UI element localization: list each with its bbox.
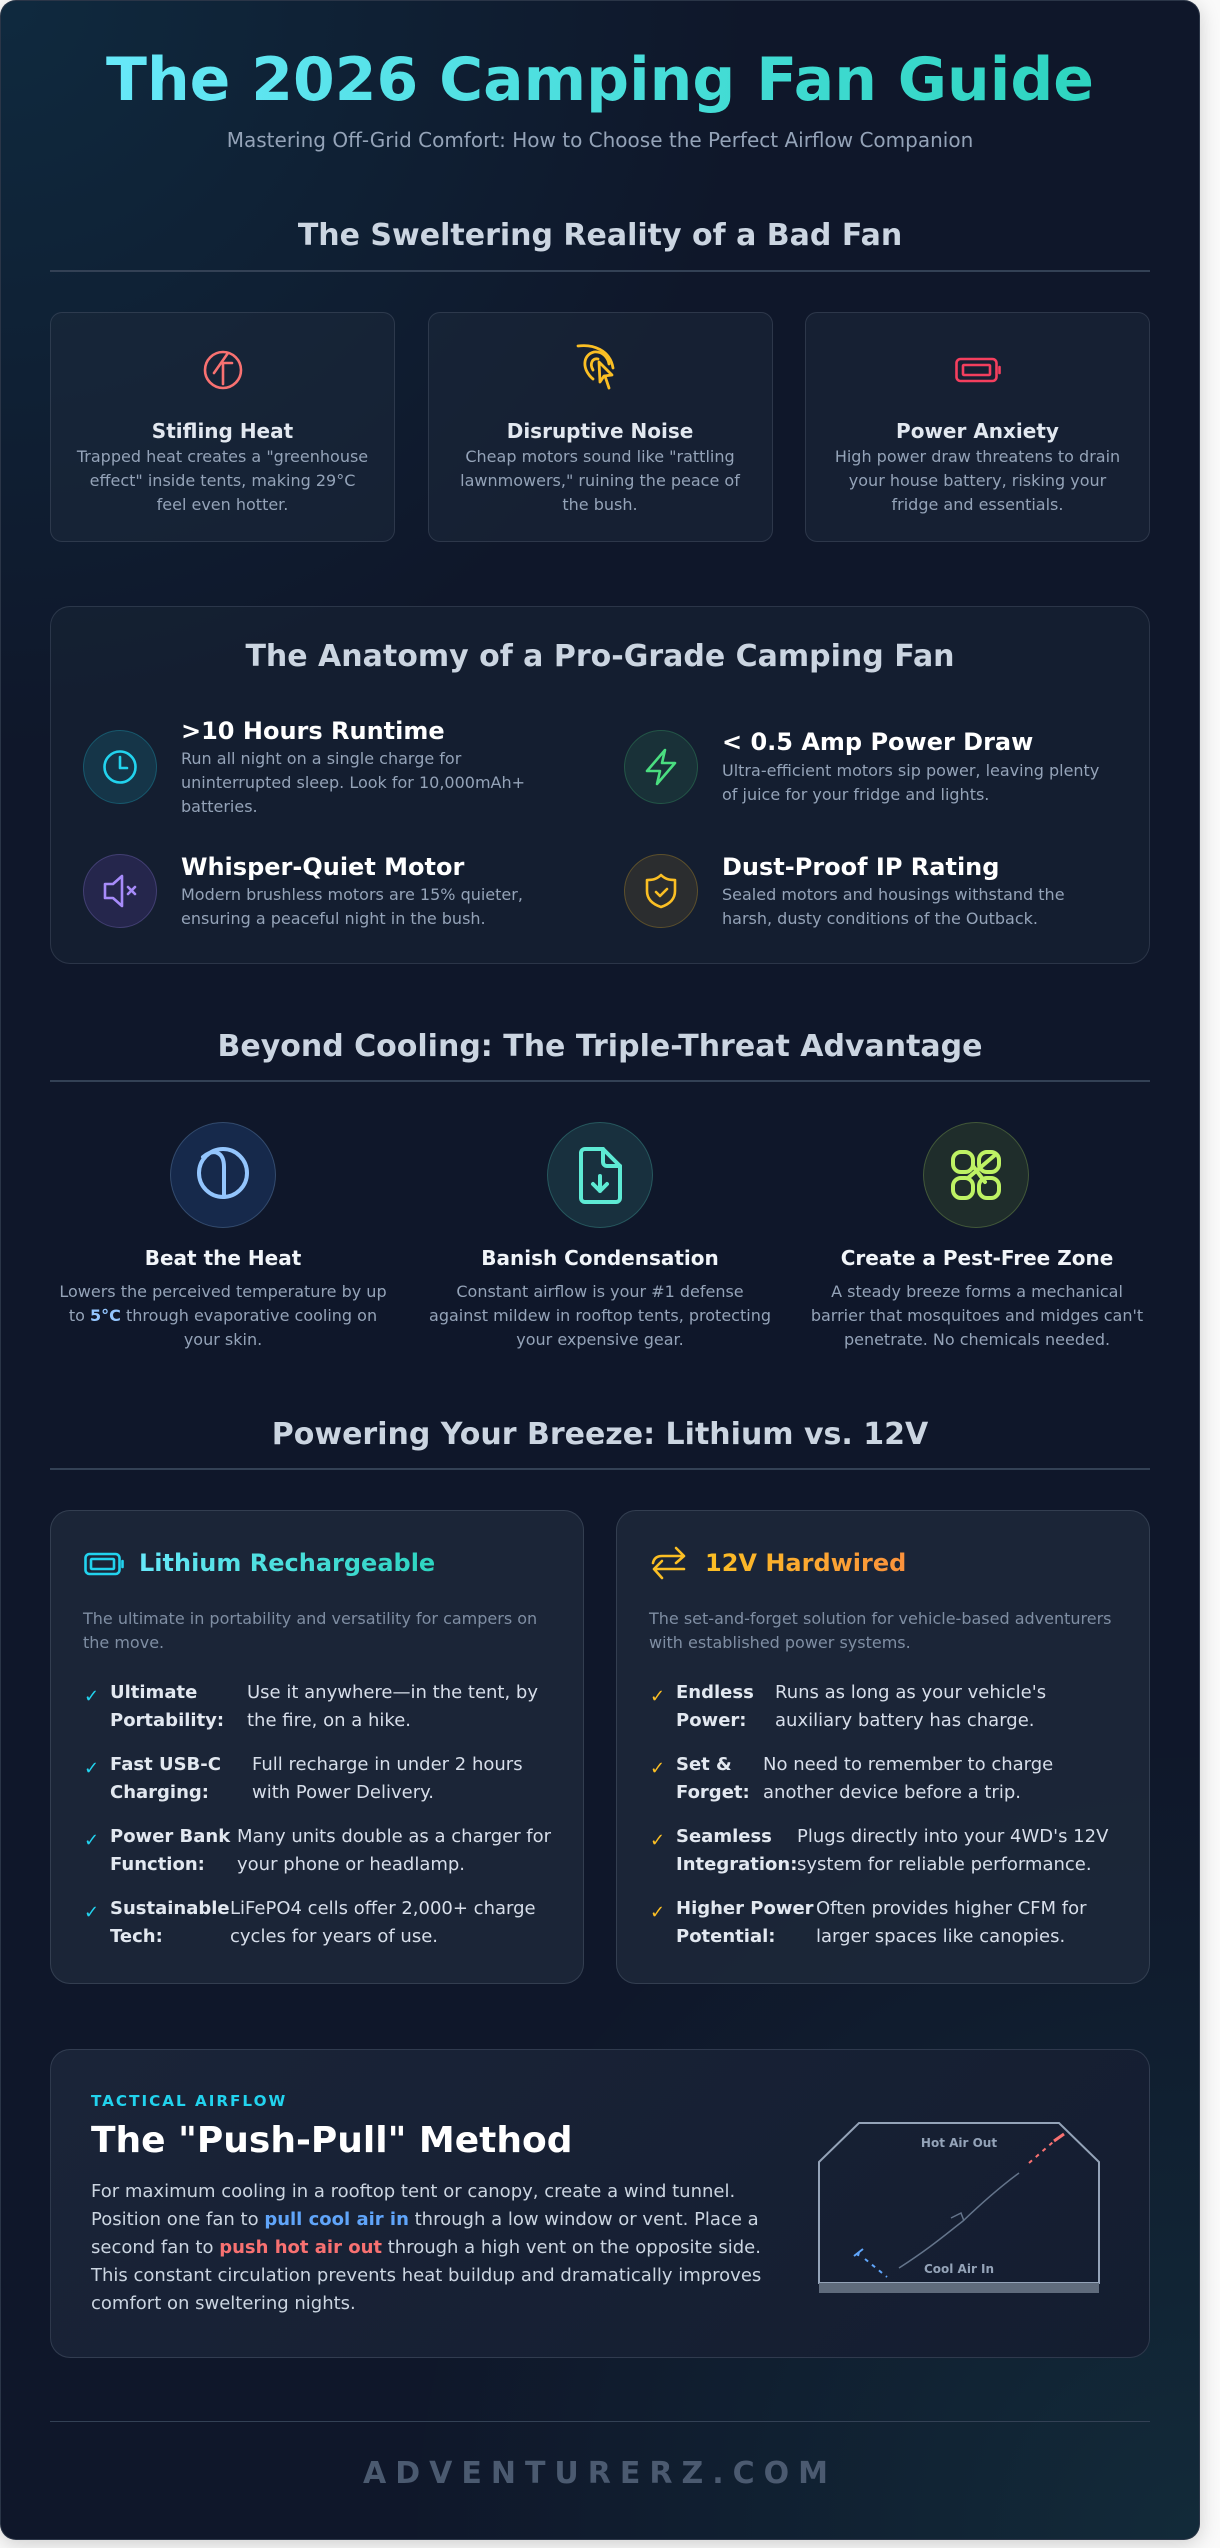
panel: lithium: Sustainable <box>110 1898 230 1919</box>
card text: the bush. <box>562 495 638 514</box>
panel: lithium: your phone or headlamp. <box>237 1854 465 1875</box>
feature text: batteries. <box>181 797 258 816</box>
benefit text: your expensive gear. <box>516 1330 684 1349</box>
feature title: Dust-Proof IP Rating <box>722 853 999 881</box>
panel: lithium: Ultimate <box>110 1682 197 1703</box>
panel title: Lithium Rechargeable <box>139 1549 435 1577</box>
panel: lithium: Full recharge in under 2 hours <box>252 1754 523 1775</box>
heading: anatomy: The Anatomy of a Pro-Grade Camping Fan <box>245 639 955 674</box>
card text: your house battery, risking your <box>849 471 1106 490</box>
panel intro <box>82 1609 537 1652</box>
panel: push-pull <box>50 2049 1150 2358</box>
card text: fridge and essentials. <box>892 495 1063 514</box>
feature title: Whisper-Quiet Motor <box>181 853 464 881</box>
feature text: Ultra-efficient motors sip power, leaving plenty <box>722 761 1099 780</box>
panel: 12v: No need to remember to charge <box>763 1754 1053 1775</box>
panel: 12v: Power: <box>676 1710 746 1731</box>
icon: shield <box>624 854 698 928</box>
card text <box>835 447 1120 514</box>
card text: Trapped heat creates a "greenhouse <box>77 447 368 466</box>
panel: 12v: ✓ <box>650 1830 665 1851</box>
panel intro: with established power systems. <box>649 1633 911 1652</box>
panel: lithium: ✓ <box>84 1758 99 1779</box>
diagram: tent airflow <box>51 2050 1149 2357</box>
benefit text: A steady breeze forms a mechanical <box>831 1282 1123 1301</box>
panel: 12v: Runs as long as your vehicle's <box>775 1682 1046 1703</box>
panel: disruptive noise <box>428 312 772 542</box>
panel: 12v: larger spaces like canopies. <box>816 1926 1065 1947</box>
panel: lithium <box>50 1510 584 1984</box>
feature text <box>181 749 525 816</box>
benefit text: penetrate. No chemicals needed. <box>844 1330 1110 1349</box>
panel intro: the move. <box>83 1633 164 1652</box>
feature text: harsh, dusty conditions of the Outback. <box>722 909 1038 928</box>
benefit title: Create a Pest-Free Zone <box>841 1246 1113 1270</box>
feature text: uninterrupted sleep. Look for 10,000mAh+ <box>181 773 525 792</box>
benefit: condensation <box>429 1122 771 1349</box>
feature text <box>722 761 1099 804</box>
footer: ADVENTURERZ.COM <box>363 2456 837 2491</box>
panel title: 12V Hardwired <box>705 1549 906 1577</box>
panel: 12v: Often provides higher CFM for <box>816 1898 1087 1919</box>
panel: lithium: ✓ <box>84 1830 99 1851</box>
panel: 12v: ✓ <box>650 1758 665 1779</box>
benefit text <box>429 1282 771 1349</box>
card text: Cheap motors sound like "rattling <box>465 447 735 466</box>
panel: 12v: Forget: <box>676 1782 750 1803</box>
eyebrow label: TACTICAL AIRFLOW <box>91 2092 287 2110</box>
method title: The "Push-Pull" Method <box>91 2120 572 2161</box>
panel: lithium: Charging: <box>110 1782 209 1803</box>
panel: stifling heat <box>50 312 395 542</box>
panel: lithium: Portability: <box>110 1710 224 1731</box>
list item: portability <box>84 1682 538 1731</box>
diagram: tent airflow: Hot Air Out <box>921 2136 997 2150</box>
panel: lithium: LiFePO4 cells offer 2,000+ charge <box>230 1898 536 1919</box>
method text: This constant circulation prevents heat buildup and dramatically improves <box>91 2265 761 2286</box>
panel intro: The ultimate in portability and versatility for campers on <box>83 1609 537 1628</box>
card title: Stifling Heat <box>152 419 293 443</box>
panel: 12v: Seamless <box>676 1826 772 1847</box>
card text: lawnmowers," ruining the peace of <box>460 471 740 490</box>
feature text: Sealed motors and housings withstand the <box>722 885 1065 904</box>
list item: higher power <box>650 1898 1087 1947</box>
feature: power draw <box>624 728 1099 804</box>
feature text: Run all night on a single charge for <box>181 749 461 768</box>
feature title: >10 Hours Runtime <box>181 717 445 745</box>
icon: battery <box>955 358 1001 382</box>
card title: Power Anxiety <box>896 419 1059 443</box>
panel: 12v: ✓ <box>650 1902 665 1923</box>
feature title: < 0.5 Amp Power Draw <box>722 728 1033 756</box>
icon: bug shield <box>923 1122 1029 1228</box>
heading: beyond cooling: Beyond Cooling: The Triple-Threat Advantage <box>218 1029 982 1064</box>
method text: Position one fan to pull cool air in through a low window or vent. Place a <box>91 2209 759 2230</box>
benefit text: Lowers the perceived temperature by up <box>59 1282 387 1301</box>
benefit: beat the heat <box>59 1122 387 1349</box>
icon: sun disc <box>170 1122 276 1228</box>
panel: lithium: Tech: <box>110 1926 163 1947</box>
benefit text: your skin. <box>184 1330 262 1349</box>
card text: High power draw threatens to drain <box>835 447 1120 466</box>
icon: muted speaker <box>83 854 157 928</box>
feature text: Modern brushless motors are 15% quieter, <box>181 885 523 904</box>
panel: 12v: Higher Power <box>676 1898 814 1919</box>
list item: integration <box>650 1826 1108 1875</box>
method text: comfort on sweltering nights. <box>91 2293 356 2314</box>
card text <box>76 447 368 514</box>
panel: 12v: Potential: <box>676 1926 775 1947</box>
panel: lithium: ✓ <box>84 1902 99 1923</box>
benefit text <box>811 1282 1143 1349</box>
icon: noise <box>576 344 614 390</box>
panel intro: The set-and-forget solution for vehicle-based adventurers <box>649 1609 1112 1628</box>
panel: anatomy <box>50 606 1150 964</box>
icon: battery <box>84 1552 124 1576</box>
icon: file down <box>547 1122 653 1228</box>
panel: lithium: Function: <box>110 1854 205 1875</box>
panel: 12v: Set & <box>676 1754 732 1775</box>
panel: 12v: another device before a trip. <box>763 1782 1021 1803</box>
feature: dust proof <box>624 853 1065 928</box>
card text <box>460 447 740 514</box>
feature text: of juice for your fridge and lights. <box>722 785 989 804</box>
panel: lithium: Many units double as a charger for <box>237 1826 551 1847</box>
icon: clock <box>83 730 157 804</box>
list item: sustainable <box>84 1898 536 1947</box>
panel: 12v: system for reliable performance. <box>797 1854 1092 1875</box>
panel: lithium: cycles for years of use. <box>230 1926 438 1947</box>
panel: 12v <box>616 1510 1150 1984</box>
panel: 12v: auxiliary battery has charge. <box>775 1710 1034 1731</box>
benefit text: Constant airflow is your #1 defense <box>456 1282 744 1301</box>
panel: 12v: Integration: <box>676 1854 797 1875</box>
heading: powering: Powering Your Breeze: Lithium vs. 12V <box>272 1417 928 1452</box>
icon: heat <box>204 350 242 390</box>
list item: power bank <box>84 1826 551 1875</box>
panel: lithium: the fire, on a hike. <box>247 1710 411 1731</box>
panel: power anxiety <box>805 312 1150 542</box>
icon: bolt <box>624 730 698 804</box>
benefit text: barrier that mosquitoes and midges can't <box>811 1306 1143 1325</box>
feature text <box>181 885 523 928</box>
icon: swap arrows <box>652 1546 686 1580</box>
subtitle: Mastering Off-Grid Comfort: How to Choose the Perfect Airflow Companion <box>227 128 973 152</box>
feature: quiet motor <box>83 853 523 928</box>
title: The 2026 Camping Fan Guide <box>106 45 1094 115</box>
panel: lithium: ✓ <box>84 1686 99 1707</box>
panel: 12v: Plugs directly into your 4WD's 12V <box>797 1826 1108 1847</box>
heading: bad fan: The Sweltering Reality of a Bad Fan <box>298 218 902 253</box>
feature text: ensuring a peaceful night in the bush. <box>181 909 486 928</box>
diagram: tent airflow: Cool Air In <box>924 2262 994 2276</box>
card title: Disruptive Noise <box>507 419 693 443</box>
benefit text: to 5°C through evaporative cooling on <box>69 1306 377 1325</box>
list item: set forget <box>650 1754 1053 1803</box>
method text: second fan to push hot air out through a high vent on the opposite side. <box>91 2237 761 2258</box>
benefit: pest free <box>811 1122 1143 1349</box>
card text: effect" inside tents, making 29°C <box>90 471 355 490</box>
feature: runtime <box>83 717 525 816</box>
panel: lithium: Use it anywhere—in the tent, by <box>247 1682 538 1703</box>
benefit text <box>59 1282 387 1349</box>
panel: 12v: Endless <box>676 1682 754 1703</box>
panel: lithium: Fast USB-C <box>110 1754 221 1775</box>
panel: 12v: ✓ <box>650 1686 665 1707</box>
card text: feel even hotter. <box>157 495 288 514</box>
benefit title: Beat the Heat <box>145 1246 301 1270</box>
list item: endless <box>650 1682 1046 1731</box>
panel: lithium: with Power Delivery. <box>252 1782 434 1803</box>
list item: usb-c <box>84 1754 523 1803</box>
benefit text: against mildew in rooftop tents, protecting <box>429 1306 771 1325</box>
method text: For maximum cooling in a rooftop tent or canopy, create a wind tunnel. <box>91 2181 735 2202</box>
method text <box>91 2178 761 2318</box>
feature text <box>722 885 1065 928</box>
panel intro <box>648 1609 1112 1652</box>
panel: lithium: Power Bank <box>110 1826 230 1847</box>
benefit title: Banish Condensation <box>481 1246 719 1270</box>
